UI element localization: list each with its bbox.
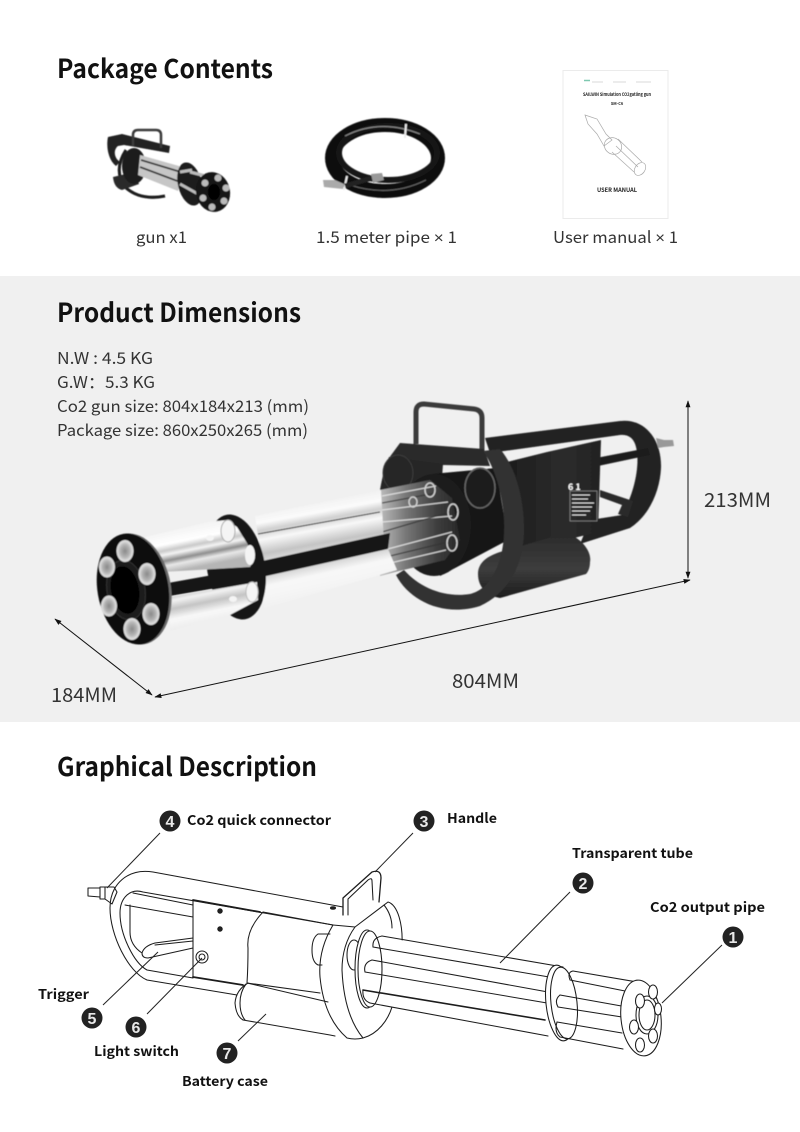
dimension: 184MM: 184MM — [51, 679, 117, 708]
ring — [320, 925, 363, 1039]
mid disc — [542, 964, 578, 1042]
shaft rear — [262, 533, 390, 578]
arrow: height — [687, 401, 689, 578]
caption: manual: User manual × 1 — [553, 224, 678, 248]
handle — [416, 404, 482, 450]
arrow: length — [155, 580, 690, 697]
rear tube disc — [355, 930, 379, 1008]
callout 7: battery case: 7 — [223, 1046, 232, 1063]
panel: product dimensions background — [0, 276, 800, 722]
main body — [507, 440, 601, 560]
glass upper front — [145, 520, 255, 572]
item: gun thumbnail — [107, 130, 234, 215]
callout 4: quick connector: 4 — [166, 814, 175, 831]
panel: graphical description — [38, 747, 765, 1090]
item: hose pipe — [323, 124, 438, 191]
line drawing: gun — [88, 871, 665, 1058]
barrel openings — [100, 540, 159, 640]
air connector — [656, 438, 674, 448]
caption: gun: gun x1 — [136, 224, 187, 248]
spec list: Co2 gun size: 804x184x213 (mm) — [57, 393, 309, 417]
callout 7: battery case — [182, 1042, 268, 1090]
panel: package contents — [57, 49, 678, 248]
center bore — [102, 557, 150, 623]
leader lines — [103, 833, 722, 1041]
spec list: Package size: 860x250x265 (mm) — [57, 417, 308, 441]
callout 5: trigger — [38, 983, 102, 1028]
item: user manual: SAILWIN Simulation CO2gatling gun — [583, 91, 651, 98]
trigger — [142, 938, 193, 958]
hub — [432, 468, 508, 576]
callout 3: handle: 3 — [420, 814, 429, 831]
label plate text: 6 1 — [568, 480, 581, 493]
callout 5: trigger: Trigger — [38, 983, 89, 1003]
rear yoke — [485, 421, 661, 544]
battery — [478, 533, 590, 598]
shaft front — [168, 566, 263, 596]
spec list: N.W : 4.5 KG — [57, 345, 153, 369]
dimension: 213MM: 213MM — [704, 484, 771, 513]
rear tubes — [365, 936, 563, 1036]
callout 6: light switch: Light switch — [94, 1040, 179, 1060]
callout 1: output pipe: Co2 output pipe — [650, 896, 765, 916]
callout 3: handle — [414, 807, 497, 832]
glass lower front — [170, 582, 258, 631]
spec list: G.W：5.3 KG — [57, 369, 155, 393]
callout 7: battery case: Battery case — [182, 1070, 268, 1090]
heading: product dimensions: Product Dimensions — [57, 293, 301, 330]
front disc — [88, 528, 178, 650]
callout 6: light switch — [94, 1016, 179, 1060]
callout 2: transparent tube — [572, 842, 693, 894]
heading: graphical description: Graphical Description — [57, 747, 317, 784]
rear hub hole — [383, 455, 413, 491]
callout 3: handle: Handle — [447, 807, 497, 827]
battery — [243, 983, 335, 1036]
glass upper rear — [255, 490, 384, 562]
panel: product dimensions — [51, 293, 771, 708]
callout 4: quick connector — [160, 809, 331, 832]
item: user manual — [563, 70, 668, 218]
arrow: width — [55, 619, 152, 695]
glass lower rear — [262, 549, 397, 608]
top plate — [389, 443, 490, 466]
big ring — [396, 449, 524, 610]
callout 1: output pipe: 1 — [729, 930, 738, 947]
rear glass tubes near hub — [380, 480, 460, 576]
tube ends — [409, 483, 458, 551]
front disc — [617, 978, 665, 1058]
callout 5: trigger: 5 — [88, 1011, 97, 1028]
plate — [193, 900, 260, 985]
handle — [343, 871, 381, 915]
heading: package contents: Package Contents — [57, 49, 273, 86]
front disc rim — [90, 528, 180, 650]
connector — [88, 887, 117, 904]
spec list — [57, 345, 309, 441]
callout 1: output pipe — [650, 896, 765, 948]
callout 2: transparent tube: 2 — [579, 876, 588, 893]
label plate text — [568, 480, 597, 521]
mid disc — [198, 510, 274, 624]
callout 4: quick connector: Co2 quick connector — [187, 809, 331, 829]
tubes mask — [360, 937, 563, 1036]
callout 6: light switch: 6 — [132, 1020, 141, 1037]
mid disc openings — [206, 520, 258, 602]
caption: pipe: 1.5 meter pipe × 1 — [316, 224, 457, 248]
dimension: 804MM: 804MM — [452, 665, 519, 694]
item: user manual: SM-C6 — [611, 101, 624, 107]
yoke — [110, 871, 343, 995]
front tubes — [557, 971, 637, 1049]
callout 2: transparent tube: Transparent tube — [572, 842, 693, 862]
body — [247, 912, 333, 993]
item: user manual: USER MANUAL — [597, 185, 637, 194]
product photo: gatling gun — [88, 404, 674, 650]
